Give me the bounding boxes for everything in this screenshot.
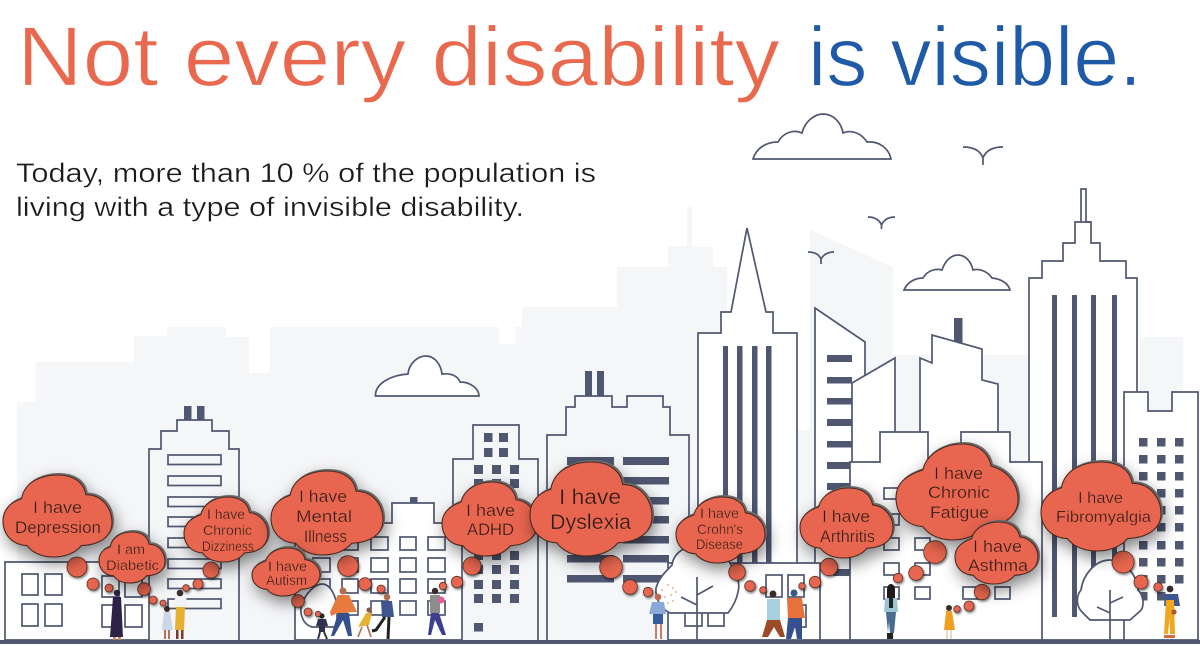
title: is visible. <box>808 10 1142 104</box>
tree: right <box>1077 560 1143 640</box>
thought bubble: Fibromyalgia: Fibromyalgia <box>1056 509 1151 526</box>
thought bubble: Chronic Fatigue: Fatigue <box>930 503 989 522</box>
thought bubble: Diabetic: I am <box>117 541 145 557</box>
intro text: living with a type of invisible disability. <box>16 192 524 222</box>
thought bubble: Autism <box>252 548 321 617</box>
thought bubble: Autism: I have <box>268 559 307 574</box>
sky cloud: right <box>904 255 1010 290</box>
building: left tower with window bars <box>149 406 239 640</box>
tree: centre left <box>301 584 337 627</box>
thought bubble: Dyslexia <box>530 462 653 597</box>
title <box>17 10 1142 104</box>
thought bubble: Depression <box>3 475 113 592</box>
thought bubble: Chronic Fatigue: I have <box>934 464 983 483</box>
sky cloud: middle <box>375 356 479 396</box>
thought bubble: Chronic Fatigue <box>893 444 1018 583</box>
building: spire tower <box>698 228 797 640</box>
thought bubble: Crohn's Disease: I have <box>700 505 739 521</box>
building: right tall tower <box>1029 189 1137 640</box>
thought bubble: Chronic Fatigue: Chronic <box>928 483 991 502</box>
tree: centre <box>656 545 739 640</box>
person: walker in orange top <box>786 590 805 639</box>
thought bubble: Mental Illness: I have <box>299 487 347 506</box>
thought bubble: ADHD <box>439 482 537 590</box>
thought bubble: Diabetic: Diabetic <box>106 557 159 573</box>
person: woman in yellow overalls <box>1164 586 1180 638</box>
ground line <box>0 640 1200 644</box>
intro text <box>16 158 596 222</box>
thought bubble: Chronic Dizziness: Chronic <box>203 523 252 538</box>
thought bubble: Crohn's Disease <box>676 497 766 593</box>
person: woman in jeans <box>884 584 898 639</box>
bird: lower <box>808 252 834 264</box>
building: dark-window block <box>453 425 538 640</box>
thought bubble: Chronic Dizziness <box>183 497 268 591</box>
title: Not every disability <box>17 10 780 104</box>
building: low block behind walkers <box>668 563 820 640</box>
building: slanted roof narrow <box>852 358 895 640</box>
person: walker in brown trousers <box>762 590 785 637</box>
person: child in orange dress <box>944 605 955 639</box>
thought bubble: Depression: Depression <box>15 518 101 537</box>
thought bubble: Chronic Dizziness: I have <box>207 507 245 522</box>
person: man with flowers <box>428 588 446 635</box>
thought bubble: Asthma: Asthma <box>968 556 1029 575</box>
thought bubble: Asthma: I have <box>973 537 1022 556</box>
thought bubble: Mental Illness <box>271 471 385 593</box>
person: child in light dress <box>162 606 173 639</box>
thought bubble: Diabetic <box>99 532 166 606</box>
building: left low block <box>5 562 157 640</box>
thought bubble: Autism: Autism <box>266 573 307 588</box>
thought bubble: Chronic Dizziness: Dizziness <box>202 539 254 554</box>
thought bubble: Mental Illness: Mental <box>296 507 352 526</box>
intro text: Today, more than 10 % of the population is <box>16 158 596 188</box>
thought bubble: Arthritis <box>799 488 893 589</box>
thought bubble: Arthritis: Arthritis <box>820 527 875 546</box>
person: woman in dark dress <box>110 590 123 640</box>
building: low wide block <box>850 432 1042 640</box>
thought bubble: Dyslexia: I have <box>559 486 621 509</box>
building: centre tower with bars <box>547 371 689 640</box>
thought bubble: ADHD: I have <box>466 501 515 520</box>
thought bubble: Crohn's Disease: Disease <box>696 536 743 552</box>
thought bubble: ADHD: ADHD <box>467 520 514 539</box>
thought bubble: Fibromyalgia: I have <box>1078 490 1123 507</box>
thought bubble: Crohn's Disease: Crohn's <box>697 521 743 537</box>
background city silhouette <box>17 207 1183 640</box>
building: stepped slanted roof <box>920 318 998 470</box>
thought bubble: Arthritis: I have <box>822 507 870 526</box>
building: slanted tower with bars <box>815 308 865 640</box>
bird: top right <box>963 147 1003 165</box>
person: photographer <box>649 594 666 639</box>
building: right edge block <box>1124 392 1198 640</box>
sky cloud: top <box>753 114 891 159</box>
building: centre left block with windows <box>295 497 462 640</box>
thought bubble: Dyslexia: Dyslexia <box>550 511 631 534</box>
people: family walking <box>316 588 394 639</box>
bird: middle <box>868 217 895 229</box>
thought bubble: Mental Illness: Illness <box>304 527 347 546</box>
thought bubble: Depression: I have <box>33 498 82 517</box>
thought bubble: Asthma <box>954 522 1038 612</box>
person: woman with yellow skirt <box>174 590 188 639</box>
thought bubble: Fibromyalgia <box>1041 462 1162 591</box>
